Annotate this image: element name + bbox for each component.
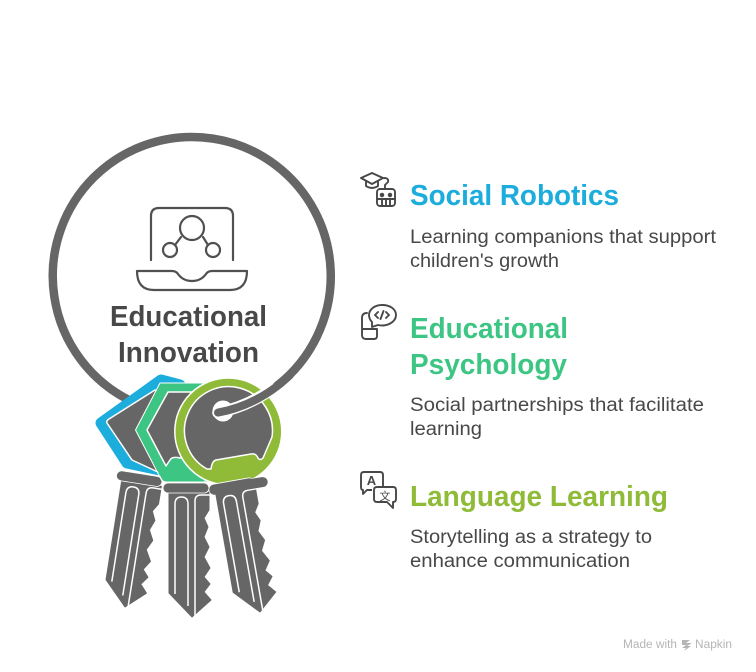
text: language learning description: Storytelling as a strategy to [410,527,652,548]
text: language learning description: enhance communication [410,551,630,572]
key: green [136,383,215,618]
icon: translation bubbles [361,472,396,508]
footer: Made with Napkin: Made with [623,639,677,651]
heading: Social Robotics: Social Robotics [410,180,619,212]
heading: Language Learning: Language Learning [410,481,668,513]
text: educational psychology description: learning [410,419,482,440]
icon: phone with code bubble [362,305,396,339]
text: educational psychology description: Social partnerships that facilitate [410,395,704,416]
key: lime [175,378,282,618]
heading: Educational Psychology: Psychology [410,349,567,381]
key: blue [96,380,180,611]
footer: Made with Napkin: Napkin [695,637,732,651]
icon: translation bubbles: A [367,473,377,488]
text: social robotics description: children's growth [410,251,559,272]
footer: Made with Napkin [623,637,732,651]
icon: translation bubbles: 文 [380,488,390,504]
ring [53,137,331,413]
title: Educational Innovation: Educational [110,301,267,333]
title: Educational Innovation: Innovation [118,337,259,369]
icon: laptop network [137,208,247,290]
icon: graduation cap and robot [361,173,395,206]
ring end through key hole [218,375,290,413]
text: social robotics description: Learning companions that support [410,227,717,248]
heading: Educational Psychology: Educational [410,313,568,345]
